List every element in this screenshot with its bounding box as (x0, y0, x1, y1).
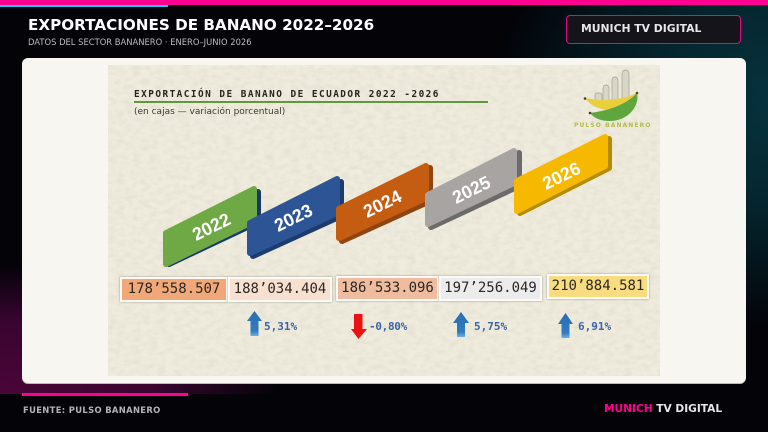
ribbon 2026: 2026 (539, 158, 584, 194)
logo: Pulso Bananero (574, 70, 651, 129)
ribbon 2024 (339, 166, 430, 241)
panel: infographic paper (108, 65, 660, 376)
value 2024: 186’533.096 (341, 280, 434, 296)
footer brand: MUNICH TV DIGITAL (604, 403, 722, 415)
brand badge (566, 15, 741, 44)
top accent bar (0, 0, 768, 7)
change 2026: 6,91% (578, 320, 611, 333)
value 2025 (439, 276, 542, 301)
ribbon 2026 (517, 137, 609, 213)
value 2025: 197’256.049 (444, 280, 537, 296)
value 2023: 188’034.404 (234, 281, 326, 297)
change 2023: 5,31% (264, 320, 297, 333)
icon: up arrow 2025 (453, 312, 469, 337)
chart subheading: (en cajas — variación porcentual) (134, 107, 285, 117)
chart heading: EXPORTACIÓN DE BANANO DE ECUADOR 2022 -2026 (134, 89, 440, 100)
value 2022: 178’558.507 (128, 281, 220, 297)
icon: rising columns (595, 70, 629, 104)
ribbon 2022: 2022 (189, 209, 234, 245)
change 2025: 5,75% (474, 320, 507, 333)
ribbon 2025 (428, 151, 519, 227)
ribbon 2025: 2025 (449, 172, 494, 208)
change 2024: -0,80% (369, 320, 407, 333)
ribbon 2023: 2023 (271, 200, 316, 236)
footer accent line (22, 393, 188, 396)
panel: main card (22, 58, 746, 383)
value 2022 (120, 277, 228, 302)
value 2023 (228, 277, 332, 302)
value 2024 (336, 276, 439, 301)
icon: green banana (590, 93, 637, 121)
logo wordmark: PULSO BANANERO (574, 122, 651, 129)
ribbon 2023 (250, 179, 341, 256)
ribbon 2022 (166, 189, 258, 264)
value 2026 (547, 274, 649, 299)
brand badge: MUNICH TV DIGITAL (581, 22, 701, 35)
icon: yellow banana (585, 93, 637, 110)
source: FUENTE: PULSO BANANERO (23, 405, 161, 415)
value 2026: 210’884.581 (552, 278, 644, 294)
icon: down arrow 2024 (351, 314, 367, 339)
subtitle: DATOS DEL SECTOR BANANERO · ENERO–JUNIO 2026 (28, 37, 252, 47)
title: EXPORTACIONES DE BANANO 2022–2026 (28, 16, 374, 34)
ribbon 2024: 2024 (360, 186, 405, 222)
icon: up arrow 2023 (247, 311, 262, 336)
icon: up arrow 2026 (558, 313, 573, 338)
